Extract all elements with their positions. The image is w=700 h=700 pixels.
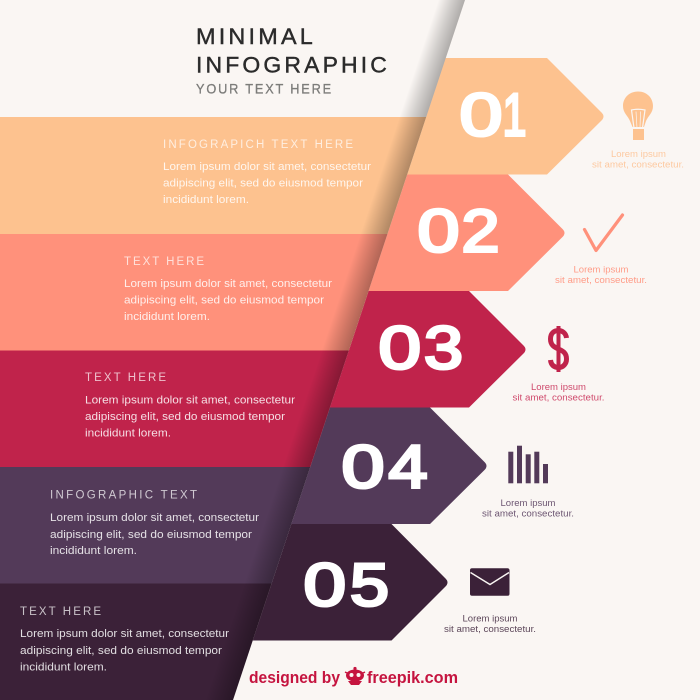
text block 2 xyxy=(124,256,332,323)
footer credit xyxy=(249,667,458,687)
icon: bar chart xyxy=(508,446,548,483)
fold shadow xyxy=(190,0,465,700)
caption 2: sit amet, consectetur. xyxy=(555,275,647,285)
title: MINIMAL xyxy=(196,24,316,49)
caption 2 xyxy=(555,264,647,285)
footer credit: freepik.com xyxy=(367,668,458,687)
caption 1 xyxy=(592,149,684,170)
caption 2: Lorem ipsum xyxy=(574,264,628,274)
text block 1: Lorem ipsum dolor sit amet, consectetur xyxy=(163,161,371,173)
text block 3: adipiscing elit, sed do eiusmod tempor xyxy=(85,411,285,423)
text block 2: adipiscing elit, sed do eiusmod tempor xyxy=(124,294,324,306)
caption 5 xyxy=(444,614,536,634)
title xyxy=(196,24,390,96)
text block 1: adipiscing elit, sed do eiusmod tempor xyxy=(163,178,363,190)
text block 3: incididunt lorem. xyxy=(85,428,171,440)
arrow 05: 5 xyxy=(350,552,389,618)
caption 3 xyxy=(512,382,604,402)
folded left panel xyxy=(0,0,470,700)
arrow 03: 0 xyxy=(378,314,421,382)
caption 4: Lorem ipsum xyxy=(500,498,556,508)
text block 4: incididunt lorem. xyxy=(50,545,137,557)
text block 5: Lorem ipsum dolor sit amet, consectetur xyxy=(20,628,229,640)
arrow 01 xyxy=(300,58,604,174)
text block 4: Lorem ipsum dolor sit amet, consectetur xyxy=(50,512,259,524)
colour bands xyxy=(0,117,470,700)
text block 2: TEXT HERE xyxy=(124,256,204,268)
caption 5: sit amet, consectetur. xyxy=(444,624,536,634)
icon: light bulb xyxy=(623,92,653,140)
text block 3 xyxy=(85,372,295,440)
arrow 04: 4 xyxy=(388,434,428,500)
text block 5 xyxy=(20,606,229,674)
arrow 01: 0 xyxy=(460,82,502,148)
text block 4: INFOGRAPHIC TEXT xyxy=(50,490,197,502)
title: INFOGRAPHIC xyxy=(196,52,390,78)
arrow 05 xyxy=(200,524,448,640)
icon: dollar sign xyxy=(550,326,566,372)
caption 5: Lorem ipsum xyxy=(462,614,518,624)
caption 4: sit amet, consectetur. xyxy=(482,508,574,518)
icon: freepik logo xyxy=(345,667,365,685)
arrow 03: 3 xyxy=(424,314,463,382)
caption 1: sit amet, consectetur. xyxy=(592,160,684,170)
arrow 04: 0 xyxy=(342,434,384,500)
text block 1 xyxy=(163,139,371,206)
text block 5: adipiscing elit, sed do eiusmod tempor xyxy=(20,645,222,657)
caption 4 xyxy=(482,498,574,518)
text block 2: Lorem ipsum dolor sit amet, consectetur xyxy=(124,278,332,290)
text block 3: TEXT HERE xyxy=(85,372,166,384)
text block 5: incididunt lorem. xyxy=(20,662,107,674)
arrow 02: 2 xyxy=(462,198,500,264)
arrow 01: 1 xyxy=(502,82,526,148)
caption 1: Lorem ipsum xyxy=(611,149,666,159)
caption 3: sit amet, consectetur. xyxy=(512,392,604,402)
text block 5: TEXT HERE xyxy=(20,606,101,618)
panel base xyxy=(0,0,465,700)
text block 3: Lorem ipsum dolor sit amet, consectetur xyxy=(85,394,295,406)
text block 2: incididunt lorem. xyxy=(124,311,210,323)
arrow 02 xyxy=(300,174,564,291)
icon: check mark xyxy=(584,215,622,250)
arrow 04 xyxy=(200,408,486,524)
text block 4 xyxy=(50,490,259,557)
text block 4: adipiscing elit, sed do eiusmod tempor xyxy=(50,529,252,541)
icon: envelope xyxy=(470,568,510,596)
text block 1: incididunt lorem. xyxy=(163,194,249,206)
title: YOUR TEXT HERE xyxy=(196,80,333,96)
text block 1: INFOGRAPICH TEXT HERE xyxy=(163,139,353,151)
arrow 05: 0 xyxy=(304,552,346,618)
arrow 02: 0 xyxy=(418,198,460,264)
arrow 03 xyxy=(200,291,526,408)
caption 3: Lorem ipsum xyxy=(531,382,586,392)
footer credit: designed by xyxy=(249,668,340,687)
